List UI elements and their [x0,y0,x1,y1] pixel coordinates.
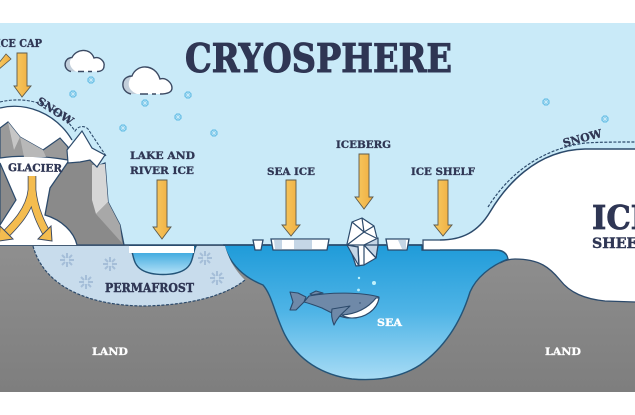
ground [0,245,635,392]
sky background [0,23,635,246]
panel: permafrost [33,246,245,306]
icon: iceberg [347,218,378,266]
ground line left [0,244,225,246]
label: iceberg: ICEBERG [336,139,391,151]
snow peak [67,131,105,167]
icon: snowflakes [69,76,609,137]
icon: bubbles [357,277,376,291]
icon: cloud 1 [65,50,104,72]
dashed snow line on ice cap [0,100,106,156]
arrow: sea ice [282,180,300,236]
arrow: ice cap [14,53,31,97]
label: snow right: SNOW [561,127,604,150]
label: glacier: GLACIER [8,162,62,175]
label: sea: SEA [377,317,403,329]
icon: cloud 2 [123,67,172,94]
icon: glacier split arrow [0,176,52,241]
right land hump [450,259,635,392]
label: land left: LAND [92,346,128,358]
sea ice floes [253,239,440,250]
panel: ice sheet [422,127,635,305]
icon: diagonal arrow [0,54,11,70]
label: lake and river ice: LAKE AND [130,150,195,162]
panel: glacier and mountains [0,100,124,245]
arrow: lake ice [153,180,171,239]
title: CRYOSPHERE [185,35,452,81]
lake and river ice [129,246,196,274]
label: snow left: SNOW [34,95,76,128]
arrow: ice shelf [434,180,452,236]
label: land right: LAND [545,346,581,358]
panel: sea [224,245,508,380]
label: lake and river ice [130,150,195,177]
left rock [0,163,16,225]
right mountain [45,160,124,245]
ice cap dome [0,106,78,245]
back mountains [0,122,68,160]
arrow: iceberg [355,154,373,209]
label: ice shelf: ICE SHELF [411,166,476,178]
permafrost crystals [60,251,224,289]
label: permafrost: PERMAFROST [105,281,194,295]
label: lake and river ice: RIVER ICE [130,165,194,177]
dashed snow line on ice sheet [488,142,635,207]
label: sea ice: SEA ICE [267,166,315,178]
icon: whale [290,291,379,325]
